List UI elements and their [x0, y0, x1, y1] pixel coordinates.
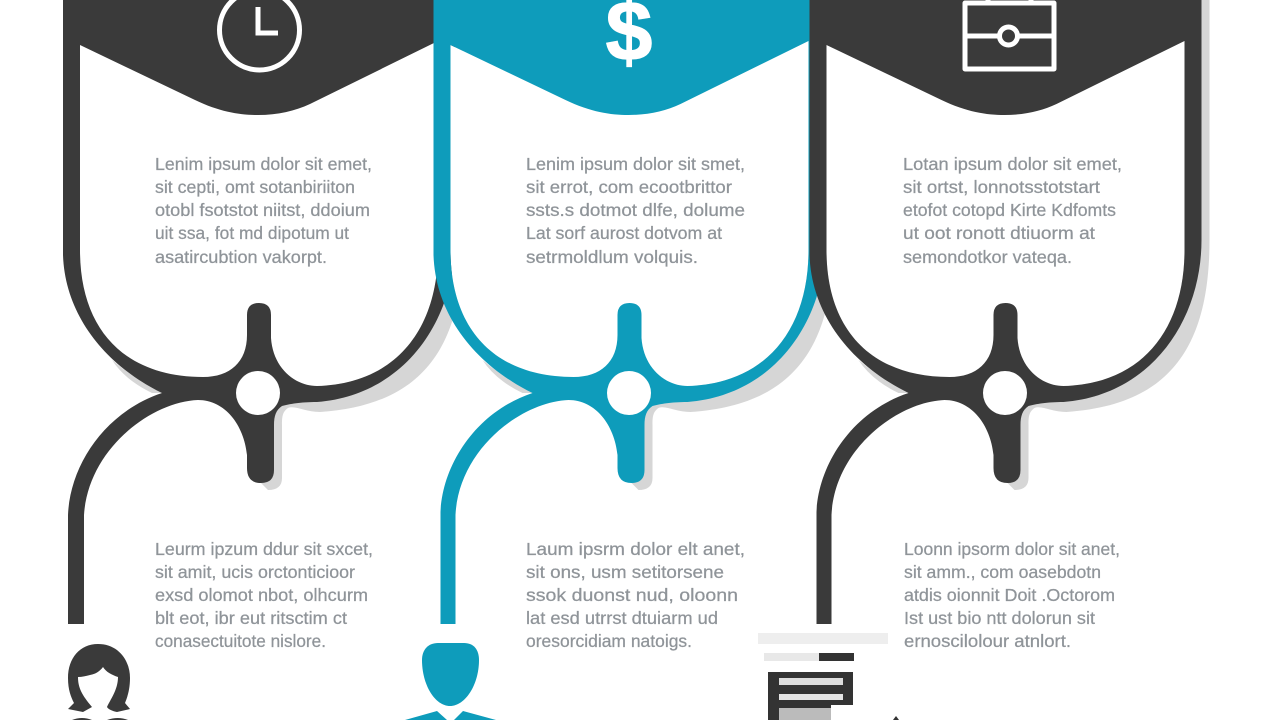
- text block: lower right: Loonn ipsorm dolor sit anet,: [904, 539, 1120, 559]
- text block: lower left: blt eot, ibr eut ritsctim ct: [155, 608, 347, 628]
- text block: lower centre: Laum ipsrm dolor elt anet,: [526, 539, 745, 559]
- icon: document with bars: [758, 633, 888, 720]
- text block: lower centre: ssok duonst nud, oloonn: [526, 585, 738, 605]
- text block: upper left: sit cepti, omt sotanbiriiton: [155, 177, 355, 197]
- panel: teal centre column frame: [434, 0, 834, 624]
- text block: lower left: conasectuitote nislore.: [155, 631, 326, 651]
- text block: lower centre: [526, 539, 745, 651]
- icon: man avatar: [405, 643, 496, 720]
- text block: upper right: semondotkor vateqa.: [903, 247, 1072, 267]
- text block: lower right: sit amm., com oasebdotn: [904, 562, 1101, 582]
- text block: lower right: atdis oionnit Doit .Octorom: [904, 585, 1115, 605]
- text block: upper left: [155, 154, 372, 267]
- text block: upper left: otobl fsotstot niitst, ddoium: [155, 200, 370, 220]
- text block: upper right: [903, 154, 1122, 267]
- text block: lower right: [904, 539, 1120, 651]
- text block: lower centre: sit ons, usm setitorsene: [526, 562, 724, 582]
- icon: small caret: [893, 716, 899, 720]
- text block: upper centre: [526, 154, 745, 267]
- text block: lower left: sit amit, ucis orctonticioor: [155, 562, 355, 582]
- text block: lower right: ernoscilolour atnlort.: [904, 631, 1071, 651]
- text block: upper centre: ssts.s dotmot dlfe, dolume: [526, 200, 745, 220]
- panel: dark left column frame: [63, 0, 463, 624]
- text block: upper right: sit ortst, lonnotsstotstart: [903, 177, 1100, 197]
- text block: upper left: asatircubtion vakorpt.: [155, 247, 327, 267]
- text block: upper left: uit ssa, fot md dipotum ut: [155, 223, 349, 243]
- icon: clock: [220, 0, 300, 70]
- text block: upper left: Lenim ipsum dolor sit emet,: [155, 154, 372, 174]
- text block: lower centre: lat esd utrrst dtuiarm ud: [526, 608, 718, 628]
- text block: upper centre: setrmoldlum volquis.: [526, 247, 698, 267]
- icon: woman avatar: [68, 644, 130, 720]
- text block: lower left: Leurm ipzum ddur sit sxcet,: [155, 539, 373, 559]
- text block: upper centre: Lenim ipsum dolor sit smet,: [526, 154, 745, 174]
- text block: lower left: exsd olomot nbot, olhcurm: [155, 585, 368, 605]
- icon: briefcase: [965, 0, 1054, 69]
- text block: lower right: Ist ust bio ntt dolorun sit: [904, 608, 1095, 628]
- text block: lower centre: oresorcidiam natoigs.: [526, 631, 692, 651]
- panel: dark right column frame: [810, 0, 1210, 624]
- text block: upper right: etofot cotopd Kirte Kdfomts: [903, 200, 1116, 220]
- text block: upper centre: Lat sorf aurost dotvom at: [526, 223, 722, 243]
- text block: lower left: [155, 539, 373, 651]
- text block: upper right: Lotan ipsum dolor sit emet,: [903, 154, 1122, 174]
- text block: upper right: ut oot ronott dtiuorm at: [903, 223, 1095, 243]
- text block: upper centre: sit errot, com ecootbrittor: [526, 177, 732, 197]
